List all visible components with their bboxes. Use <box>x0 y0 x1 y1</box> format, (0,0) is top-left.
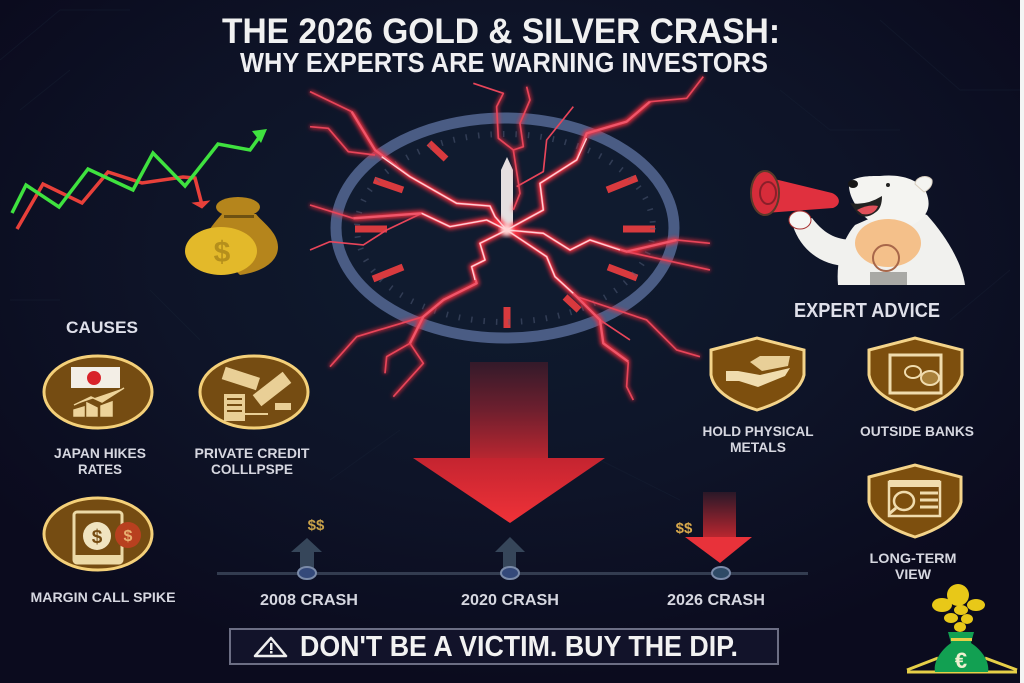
bear arm <box>793 218 856 266</box>
bear body <box>838 205 965 285</box>
label: outside banks: OUTSIDE BANKS <box>860 423 974 439</box>
marker: 2020 crash <box>461 537 559 609</box>
clock with lightning cracks <box>310 77 710 400</box>
label: hold physical metals: HOLD PHYSICAL <box>702 423 814 439</box>
hour marks <box>355 143 655 328</box>
panel: expert advice <box>702 300 974 582</box>
icon: phone with dollar coins <box>44 498 152 570</box>
icon: phone with dollar coins: $ <box>124 528 133 545</box>
label: Japan hikes rates: JAPAN HIKES <box>54 445 146 461</box>
icon: gold money bag: $ <box>214 236 231 269</box>
icon: polar bear with megaphone <box>751 171 965 285</box>
label: margin call spike: MARGIN CALL SPIKE <box>30 589 175 605</box>
icon: warning triangle <box>255 638 286 656</box>
clock hand <box>501 157 513 230</box>
label: private credit collapse: PRIVATE CREDIT <box>194 445 310 461</box>
icon: phone with dollar coins: $ <box>92 527 103 548</box>
icon: gold money bag <box>185 197 278 275</box>
marker: 2020 crash: 2020 CRASH <box>461 592 559 609</box>
lightning <box>310 77 710 400</box>
marker: 2008 crash <box>260 517 358 609</box>
megaphone <box>762 176 839 213</box>
heading: expert advice: EXPERT ADVICE <box>794 300 940 322</box>
title: WHY EXPERTS ARE WARNING INVESTORS <box>240 47 768 78</box>
big down arrow <box>413 362 605 523</box>
bear head <box>849 176 929 228</box>
panel: causes <box>30 318 310 605</box>
timeline <box>217 492 808 609</box>
icon: credit cards and building <box>200 356 308 428</box>
marker: 2008 crash: $$ <box>308 517 325 534</box>
clock ring <box>336 118 674 338</box>
heading: causes: CAUSES <box>66 318 138 337</box>
marker: 2008 crash: 2008 CRASH <box>260 592 358 609</box>
marker: 2026 crash: 2026 CRASH <box>667 592 765 609</box>
icon: shield safe <box>869 338 962 410</box>
label: private credit collapse: COLLLPSPE <box>211 461 293 477</box>
callout banner: DON'T BE A VICTIM. BUY THE DIP. <box>300 631 738 663</box>
icon: green euro bag with coins <box>907 584 1017 673</box>
icon: shield hand holding metals <box>711 338 804 410</box>
icon: Japan flag and rising bars <box>44 356 152 428</box>
lightbulb <box>855 219 921 267</box>
label: long-term view: LONG-TERM <box>870 550 956 566</box>
title: THE 2026 GOLD & SILVER CRASH: <box>222 12 780 51</box>
title <box>222 12 780 78</box>
label: Japan hikes rates: RATES <box>78 461 122 477</box>
line chart: green and red price lines <box>12 129 267 229</box>
icon: shield calendar <box>869 465 961 537</box>
marker: 2026 crash: $$ <box>676 520 693 537</box>
minute ticks <box>357 134 653 322</box>
label: long-term view: VIEW <box>895 566 932 582</box>
label: hold physical metals: METALS <box>730 439 786 455</box>
marker: 2026 crash <box>667 492 765 609</box>
icon: green euro bag with coins: € <box>955 648 967 673</box>
